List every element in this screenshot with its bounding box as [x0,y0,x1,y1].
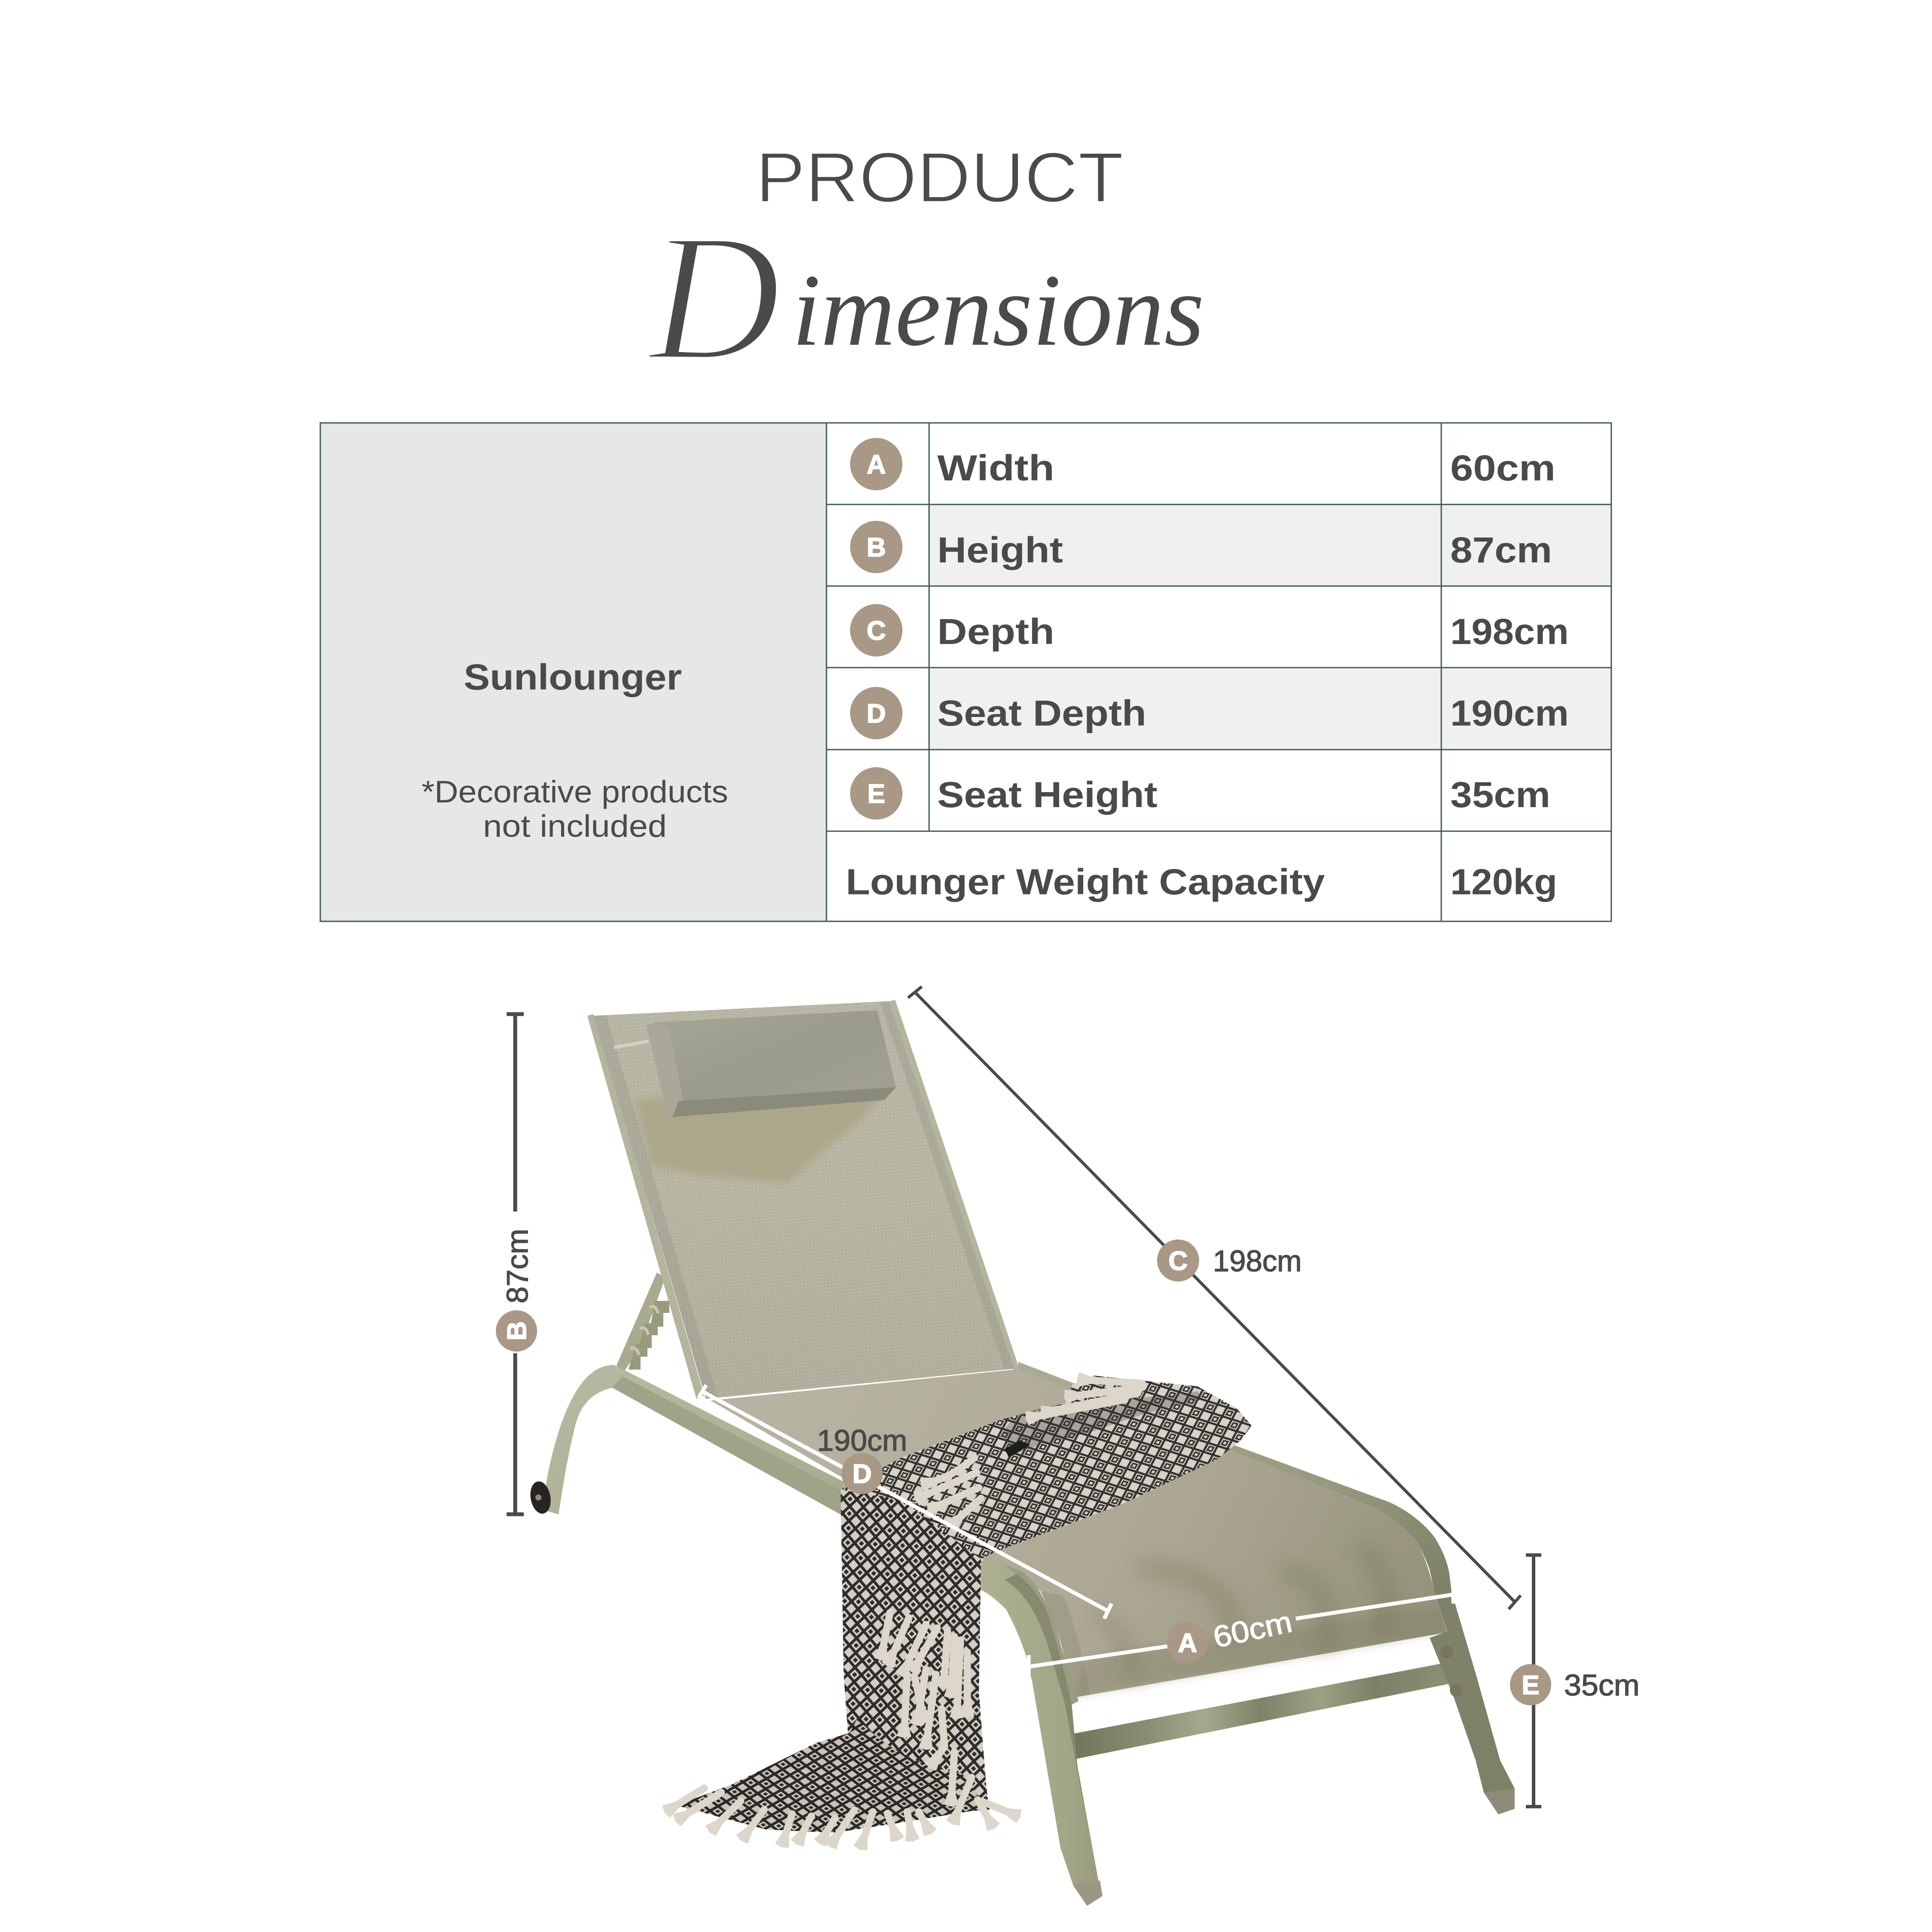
headrest pillow [614,1010,896,1117]
note: decorative products [422,775,728,844]
badge A: A [1178,1628,1197,1658]
row B: height: 87cm [1450,530,1552,570]
title: PRODUCT: PRODUCT [756,138,1124,217]
badge B [850,521,902,573]
throw: floor portion [676,1717,987,1833]
badge A: A [867,450,886,480]
badge E [850,767,902,820]
backrest fabric [593,1001,1014,1399]
badge B: B [502,1321,532,1340]
row C: depth: Depth [937,611,1054,652]
row D: seat depth: 190cm [1450,693,1569,733]
seat lower shade [1074,1606,1447,1698]
row C: depth [850,604,1569,656]
row E: seat height: 35cm [1450,775,1550,815]
row C: depth: 198cm [1450,611,1569,652]
throw: folded portion on seat [841,1376,1252,1559]
rail lower face [612,1376,880,1533]
label 60cm: 60cm [1210,1605,1295,1654]
row D: seat depth [850,687,1569,739]
left front leg inner rim [1005,1565,1078,1707]
badge D [850,687,902,739]
row: lounger weight capacity: Lounger Weight Capacity [846,862,1325,902]
row B: height [850,521,1552,573]
throw fringes [676,1380,1142,1837]
badge A [1167,1622,1208,1663]
product name: Sunlounger [464,657,682,697]
row: lounger weight capacity: 120kg [1450,862,1557,902]
label 190cm: 190cm [817,1424,907,1457]
panel: sunlounger label cell [320,423,827,921]
badge C [850,604,902,656]
illustration: sun lounger with throw [528,1000,1515,1906]
crossbar [1069,1662,1453,1759]
dimension D: seat depth [699,1385,1112,1619]
badge D [841,1453,883,1494]
badge A [850,438,902,490]
dimension A: width [1029,1582,1453,1680]
seat hem [1041,1592,1091,1698]
note: decorative products: not included [483,809,667,844]
badge E: E [867,779,885,809]
dimension B: height [496,1014,537,1514]
rear leg and left rail [544,1365,884,1533]
badge E: E [1522,1671,1540,1700]
badge D: D [853,1459,872,1489]
row A: width: Width [937,448,1054,488]
title: Dimensions script: imensions [792,253,1204,367]
label 198cm: 198cm [1213,1244,1302,1278]
panel: dimensions table [320,423,1611,921]
badge C [1157,1239,1199,1282]
label 35cm: 35cm [1564,1668,1640,1702]
badge C: C [867,616,886,646]
row D: seat depth: Seat Depth [937,693,1146,733]
badge B [496,1310,537,1352]
badge C: C [1169,1246,1188,1276]
badge E [1510,1664,1551,1705]
note: decorative products: *Decorative products [422,775,728,809]
row: lounger weight capacity [846,862,1557,902]
row E: seat height: Seat Height [937,775,1157,815]
throw: draped portion [841,1473,990,1820]
badge B: B [867,533,886,562]
rear wheel [528,1480,553,1515]
row B: height: Height [937,530,1063,570]
dimension C: depth [908,987,1521,1609]
dimension E: seat height [1510,1555,1640,1807]
pillow shadow [635,1091,884,1183]
right front leg and far rail [1018,1362,1515,1814]
ratchet support [617,1273,669,1374]
label 87cm: 87cm [501,1229,534,1303]
backrest frame [587,1000,1020,1399]
row A: width: 60cm [1450,448,1555,488]
backrest side hems [593,1001,1014,1399]
seat fabric [711,1369,1447,1698]
row A: width [850,438,1555,490]
badge D: D [867,699,886,729]
left front leg [980,1558,1103,1906]
title: Dimensions script: D [646,196,781,398]
foliage shadows [1099,1550,1387,1674]
row E: seat height [850,767,1550,820]
